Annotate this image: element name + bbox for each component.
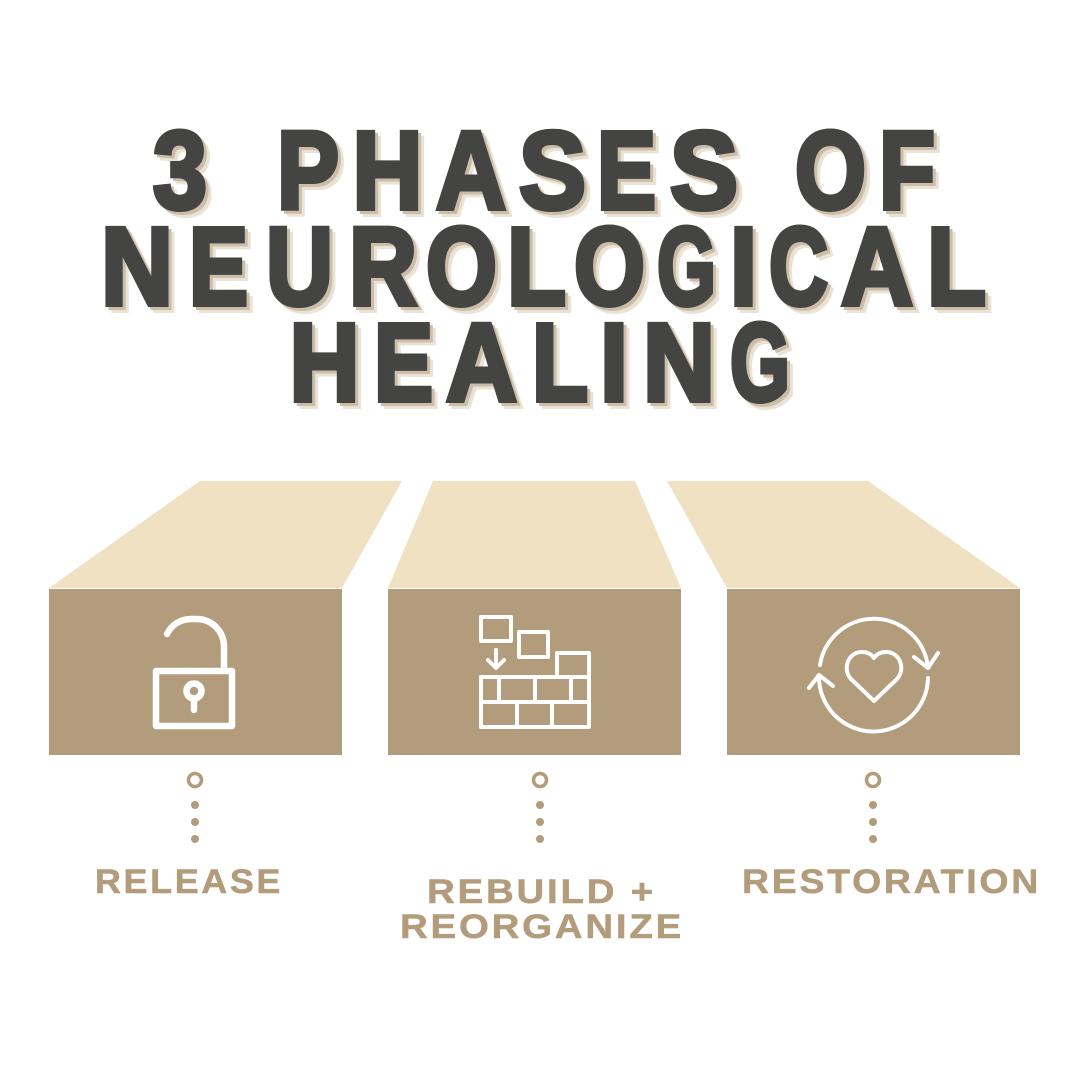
title line 3: I [600,302,628,424]
block top: restoration [667,481,1020,588]
title line 2: L [927,206,986,328]
block front: restoration [727,589,1020,755]
block top: release [49,481,402,588]
label: restoration: RESTORATION [742,863,1041,901]
title line 2: I [730,206,757,328]
title line 3: A [446,302,517,424]
icon: heart in cycle arrows [809,619,938,731]
title line 1: 3 [153,110,207,232]
label: release: RELEASE [95,863,283,901]
title line 1: E [597,110,656,232]
title line 2: C [769,206,828,328]
title line 2: O [574,206,645,328]
title line 1: P [277,110,339,232]
title line 1: H [352,110,422,232]
title line 2: E [189,206,248,328]
panel: rebuild and reorganize [388,481,684,946]
title line 2: A [841,206,913,328]
title line 2: U [266,206,333,328]
label: rebuild and reorganize [400,873,684,946]
connector dots: rebuild [534,774,546,843]
title line 3: E [374,302,433,424]
label: rebuild and reorganize: REORGANIZE [400,908,684,946]
connector dots: restoration [866,774,880,843]
title line 3: G [730,302,790,424]
connector dots: release [188,774,202,843]
title line 1: S [519,110,586,232]
title line 2: G [657,206,716,328]
title line 1: F [879,110,935,232]
icon: brick wall with falling bricks [481,617,589,727]
title line 1: O [795,110,866,232]
title line 2: O [426,206,497,328]
title line 1: A [436,110,506,232]
title line 3: L [532,302,588,424]
panel: restoration [667,481,1041,901]
title line 2: R [349,206,417,328]
panel: release [49,481,402,901]
block top: rebuild [388,481,681,588]
title line 3: N [643,302,715,424]
title [101,110,986,424]
title line 2: N [101,206,173,328]
title line 1: S [670,110,738,232]
icon: open padlock [156,619,232,726]
title line 2: L [507,206,566,328]
block front: release [49,589,342,755]
title line 3: H [290,302,360,424]
block front: rebuild [388,589,681,755]
label: rebuild and reorganize: REBUILD + [427,873,656,911]
